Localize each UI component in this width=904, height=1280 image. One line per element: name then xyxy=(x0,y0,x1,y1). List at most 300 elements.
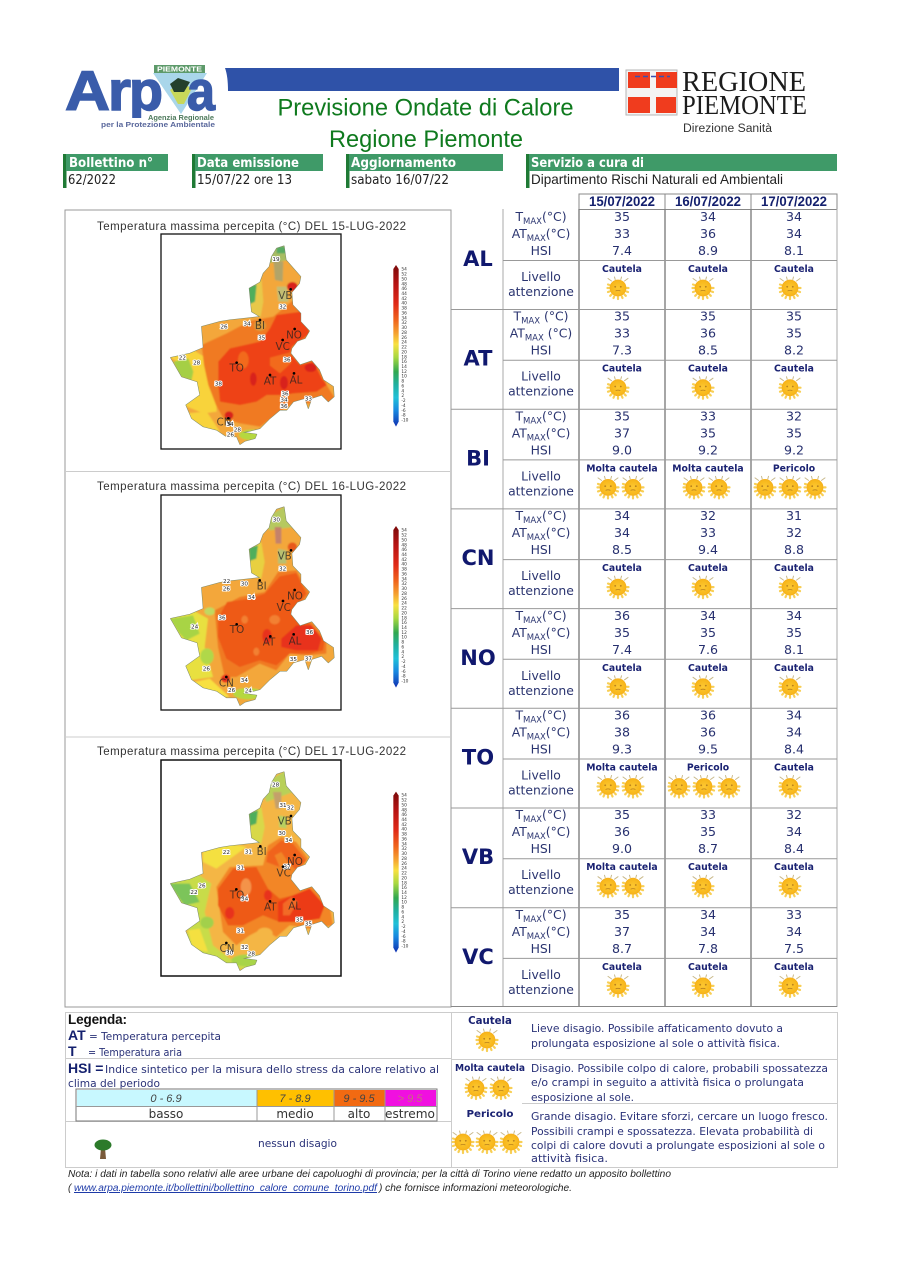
colour scale: -2 xyxy=(401,924,406,930)
colour scale: 26 xyxy=(401,596,407,602)
city markers: AT xyxy=(264,902,277,914)
values 17/07: 34 xyxy=(786,924,802,939)
map frame 15 luglio xyxy=(161,234,341,449)
colour scale: 22 xyxy=(401,345,407,351)
row labels: AT xyxy=(512,226,527,241)
values 16/07 xyxy=(688,807,728,897)
values 15/07: 36 xyxy=(614,824,630,839)
values 16/07: 33 xyxy=(700,807,716,822)
map values: 37 xyxy=(305,656,312,662)
row labels: (°C) xyxy=(542,708,567,722)
date header: 17/07/2022 xyxy=(761,193,827,209)
values 15/07: 35 xyxy=(614,209,630,224)
values 16/07: 8.9 xyxy=(698,243,718,258)
province code: BI xyxy=(466,446,490,470)
values 16/07: 9.2 xyxy=(698,442,718,457)
values 16/07: 34 xyxy=(700,907,716,922)
info: aggiornamento xyxy=(346,154,503,188)
values 17/07: Cautela xyxy=(774,364,814,375)
values 16/07: Cautela xyxy=(688,364,728,375)
colour scale: 30 xyxy=(401,851,407,857)
values 16/07: 36 xyxy=(700,724,716,740)
values 15/07 xyxy=(602,309,642,399)
map values: 26 xyxy=(228,688,236,694)
values 15/07: 9.0 xyxy=(612,442,632,457)
row: VC xyxy=(462,907,837,997)
colour scale: -4 xyxy=(401,403,406,409)
legend HSI: clima del periodo xyxy=(68,1077,160,1090)
values 17/07: 8.2 xyxy=(784,343,804,358)
colour scale: 34 xyxy=(401,315,407,321)
note: Nota: i dati in tabella sono relativi alle aree urbane dei capoluoghi di provincia; per la città di Torino viene redatto un apposito bollettino xyxy=(68,1169,671,1180)
values 15/07: 7.4 xyxy=(612,642,632,657)
row labels: attenzione xyxy=(508,583,574,598)
values 16/07: 34 xyxy=(700,209,716,224)
title: Regione Piemonte xyxy=(329,126,523,153)
values 17/07: Pericolo xyxy=(773,463,815,474)
title xyxy=(278,94,574,153)
values 16/07: 33 xyxy=(700,408,716,423)
row labels: HSI xyxy=(531,542,551,557)
values 16/07: 8.7 xyxy=(698,841,718,856)
flag xyxy=(626,70,677,115)
legend HSI: HSI = xyxy=(68,1060,103,1076)
row labels: attenzione xyxy=(508,284,574,299)
note: www.arpa.piemonte.it/bollettini/bollettino_calore_comune_torino.pdf xyxy=(74,1183,378,1194)
colour scale: -8 xyxy=(401,939,406,945)
colour scale: -10 xyxy=(401,418,409,424)
wordmark: REGIONE xyxy=(682,66,806,98)
map 17 luglio xyxy=(170,772,408,971)
map values: 34 xyxy=(248,595,255,601)
values 15/07: Cautela xyxy=(602,563,642,574)
map values: 35 xyxy=(296,918,303,924)
colour scale: -6 xyxy=(401,408,406,414)
map values: 22 xyxy=(190,890,198,896)
HSI scale table xyxy=(76,1089,437,1121)
province code: VB xyxy=(462,845,494,869)
row labels xyxy=(508,209,574,299)
legend HSI: Indice sintetico per la misura dello stress da calore relativo al xyxy=(105,1063,439,1076)
panel: maps xyxy=(65,210,451,1007)
map values: 36 xyxy=(281,392,289,398)
info: data emissione xyxy=(192,154,323,188)
logo: Arpa Piemonte xyxy=(65,59,216,129)
values 15/07: 9.3 xyxy=(612,742,632,756)
row labels: MAX xyxy=(525,334,544,344)
colour scale: 6 xyxy=(401,909,404,915)
colour scale: -4 xyxy=(401,929,406,935)
row labels: T xyxy=(513,309,521,324)
values 17/07: 8.4 xyxy=(784,742,804,756)
caption: Direzione Sanità xyxy=(683,123,773,135)
colour scale: 14 xyxy=(401,364,407,370)
colour scale: 28 xyxy=(401,591,407,597)
values 16/07: 35 xyxy=(700,625,716,640)
colour scale: 2 xyxy=(401,919,404,925)
map values: 28 xyxy=(234,428,241,434)
colour scale: 48 xyxy=(401,807,407,813)
date header: 16/07/2022 xyxy=(675,193,741,209)
colour scale: 38 xyxy=(401,832,407,838)
values 15/07: 7.4 xyxy=(612,243,632,258)
colour scale: 38 xyxy=(401,306,407,312)
row labels: T xyxy=(515,209,523,224)
row labels: HSI xyxy=(531,841,551,856)
map values: 34 xyxy=(241,897,249,903)
values 16/07: 33 xyxy=(700,525,716,540)
row labels: (°C) xyxy=(542,807,567,822)
map values: 34 xyxy=(243,321,251,327)
values 17/07: Cautela xyxy=(774,762,814,774)
values 16/07: Cautela xyxy=(688,563,728,574)
colour scale: 4 xyxy=(401,388,404,394)
city markers xyxy=(219,549,303,689)
row: CN xyxy=(451,508,837,609)
row labels: (°C) xyxy=(546,525,570,540)
map values xyxy=(190,782,312,958)
values 16/07 xyxy=(688,508,728,598)
row labels: HSI xyxy=(531,941,551,956)
values 15/07: Molta cautela xyxy=(586,762,658,774)
colour scale: -6 xyxy=(401,934,406,940)
row labels: AT xyxy=(512,525,527,540)
colour scale: 48 xyxy=(401,542,407,548)
colour scale: 20 xyxy=(401,349,407,355)
colour scale: 46 xyxy=(401,286,407,292)
legend Cautela: Cautela xyxy=(468,1016,512,1027)
colour scale: 16 xyxy=(401,620,407,626)
values 17/07: 7.5 xyxy=(784,941,804,956)
values 17/07: 33 xyxy=(786,907,802,922)
values 15/07: Cautela xyxy=(602,264,642,275)
values 15/07: 37 xyxy=(614,425,630,440)
city markers: VC xyxy=(276,341,290,353)
colour scale: 10 xyxy=(401,374,407,380)
row labels: HSI xyxy=(531,442,551,457)
colour scale: 50 xyxy=(401,276,407,282)
colour scale: 28 xyxy=(401,330,407,336)
city markers: VB xyxy=(278,551,292,563)
province code: VC xyxy=(462,945,494,969)
row: VB xyxy=(451,807,837,908)
row labels: MAX xyxy=(527,832,546,842)
values 15/07: Cautela xyxy=(602,364,642,375)
map values: 35 xyxy=(305,921,312,927)
values 16/07 xyxy=(668,708,740,798)
city markers: TO xyxy=(229,624,244,636)
row labels: attenzione xyxy=(508,483,574,498)
values 15/07: Molta cautela xyxy=(586,463,658,474)
values 16/07: 7.6 xyxy=(698,642,718,657)
values 17/07: 31 xyxy=(786,508,802,523)
row labels: MAX xyxy=(527,932,546,942)
values 17/07: 32 xyxy=(786,408,802,423)
HSI scale table: > 9.5 xyxy=(398,1093,423,1105)
colour scale: 44 xyxy=(401,552,407,558)
row labels: MAX xyxy=(523,416,542,426)
info: data emissione: 15/07/22 ore 13 xyxy=(197,173,292,188)
legend Molta cautela xyxy=(455,1062,828,1104)
values 16/07: 9.5 xyxy=(698,742,718,756)
row labels: T xyxy=(515,608,523,623)
values 17/07: 35 xyxy=(786,326,802,341)
map values: 36 xyxy=(280,404,288,410)
colour scale: -6 xyxy=(401,669,406,675)
row labels: MAX xyxy=(521,317,540,327)
legend Pericolo: attività fisica. xyxy=(531,1152,608,1165)
row labels: (°C) xyxy=(546,425,570,440)
map values: 28 xyxy=(248,952,255,958)
city markers: AL xyxy=(288,901,301,913)
colour scale: 22 xyxy=(401,871,407,877)
city markers: TO xyxy=(229,890,244,902)
row labels: MAX xyxy=(527,633,546,643)
colour scale: 24 xyxy=(401,340,407,346)
colour scale: 50 xyxy=(401,802,407,808)
map values: 34 xyxy=(241,678,248,684)
info: servizio xyxy=(526,154,837,188)
map frame 16 luglio xyxy=(161,495,341,710)
map values: 22 xyxy=(179,356,186,362)
map title 15 luglio: Temperatura massima percepita (°C) DEL 15-LUG-2022 xyxy=(97,221,406,233)
legend Molta cautela: Molta cautela xyxy=(455,1063,525,1074)
legend AT: = Temperatura percepita xyxy=(89,1030,221,1043)
city markers: AT xyxy=(264,375,277,387)
row labels: MAX xyxy=(523,516,542,526)
values 16/07: Cautela xyxy=(688,962,728,973)
map values xyxy=(179,257,312,438)
colour scale: 26 xyxy=(401,335,407,341)
values 17/07 xyxy=(774,309,814,399)
logo wordmark: A xyxy=(65,59,110,122)
colour scale: 16 xyxy=(401,359,407,365)
values 17/07 xyxy=(754,408,826,498)
colour scale: 8 xyxy=(401,640,404,646)
province code: TO xyxy=(462,746,494,770)
colour scale: 48 xyxy=(401,281,407,287)
map values: 30 xyxy=(278,831,286,837)
map values: 28 xyxy=(193,360,201,366)
values 17/07 xyxy=(774,807,814,897)
row labels: T xyxy=(515,907,523,922)
row labels: AT xyxy=(512,924,527,939)
city markers: VB xyxy=(278,290,292,302)
values 16/07: 34 xyxy=(700,924,716,939)
colour scale: 26 xyxy=(401,861,407,867)
map values: 22 xyxy=(223,579,231,585)
map frame 17 luglio xyxy=(161,760,341,976)
map values: 26 xyxy=(198,884,206,890)
colour scale: 16 xyxy=(401,885,407,891)
row: BI xyxy=(451,408,837,509)
colour scale: 18 xyxy=(401,880,407,886)
values 15/07: 8.7 xyxy=(612,941,632,956)
legend Pericolo xyxy=(452,1109,828,1165)
values 16/07: 7.8 xyxy=(698,941,718,956)
province code: AT xyxy=(464,347,493,371)
colour scale: 36 xyxy=(401,836,407,842)
values 17/07: Cautela xyxy=(774,663,814,674)
colour scale: 6 xyxy=(401,383,404,389)
row labels: Livello xyxy=(521,269,561,284)
logo wordmark: p xyxy=(129,59,163,122)
map values: 33 xyxy=(305,397,312,403)
colour scale: 36 xyxy=(401,310,407,316)
info: data emissione: Data emissione xyxy=(197,156,299,171)
legend Pericolo: Grande disagio. Evitare sforzi, cercare un luogo fresco. xyxy=(531,1110,828,1123)
map values: 26 xyxy=(203,666,210,672)
values 17/07: 35 xyxy=(786,425,802,440)
row labels: attenzione xyxy=(508,683,574,698)
city markers: AL xyxy=(290,374,303,386)
values 16/07: Cautela xyxy=(688,663,728,674)
values 15/07 xyxy=(602,508,642,598)
values 15/07: Cautela xyxy=(602,962,642,973)
row labels: MAX xyxy=(523,915,542,925)
values 16/07: 9.4 xyxy=(698,542,718,557)
city markers: BI xyxy=(255,320,265,332)
colour scale: 12 xyxy=(401,895,407,901)
values 16/07: 36 xyxy=(700,326,716,341)
row labels: attenzione xyxy=(508,882,574,897)
map values: 36 xyxy=(283,357,291,363)
note: ) che fornisce informazioni meteorologiche. xyxy=(378,1183,572,1194)
HSI scale table: basso xyxy=(149,1107,183,1121)
info: aggiornamento: Aggiornamento xyxy=(351,156,456,171)
legend Molta cautela: esposizione al sole. xyxy=(531,1091,634,1104)
city markers: NO xyxy=(286,329,302,341)
row labels: MAX xyxy=(527,234,546,244)
values 15/07: 34 xyxy=(614,508,630,523)
colour scale: 6 xyxy=(401,644,404,650)
row labels: (°C) xyxy=(540,309,569,324)
values 17/07 xyxy=(774,508,814,598)
colour scale: 50 xyxy=(401,537,407,543)
colour scale: 20 xyxy=(401,610,407,616)
colour scale: 44 xyxy=(401,817,407,823)
colour scale: 10 xyxy=(401,635,407,641)
logo caption: per la Protezione Ambientale xyxy=(101,120,215,129)
colour scale: 8 xyxy=(401,379,404,385)
logo triangle xyxy=(153,73,207,114)
values 16/07: Molta cautela xyxy=(672,463,744,474)
date header xyxy=(579,193,837,210)
colour scale: 38 xyxy=(401,567,407,573)
city markers: NO xyxy=(287,856,303,868)
map values: 35 xyxy=(290,657,297,663)
city markers: VB xyxy=(278,816,292,828)
colour scale: -10 xyxy=(401,679,409,685)
values 16/07: Cautela xyxy=(688,862,728,873)
map 15 luglio xyxy=(170,246,408,445)
row labels: (°C) xyxy=(542,907,567,922)
row labels: (°C) xyxy=(546,824,570,839)
colour scale: 52 xyxy=(401,798,407,804)
values 16/07: 32 xyxy=(700,508,716,523)
row labels: Livello xyxy=(521,867,561,882)
values 15/07: 35 xyxy=(614,625,630,640)
values 15/07: Cautela xyxy=(602,663,642,674)
colour scale: -8 xyxy=(401,413,406,419)
row labels: attenzione xyxy=(508,982,574,997)
colour scale: 40 xyxy=(401,301,407,307)
colour scale: 14 xyxy=(401,625,407,631)
values 16/07: 8.5 xyxy=(698,343,718,358)
wordmark xyxy=(682,66,807,120)
row labels xyxy=(508,907,574,997)
map values: 31 xyxy=(237,866,244,872)
values 17/07 xyxy=(774,608,814,698)
legend Cautela: prolungata esposizione al sole o attività fisica. xyxy=(531,1037,780,1050)
values 17/07: 34 xyxy=(786,708,802,722)
colour scale: -2 xyxy=(401,659,406,665)
logo label: Piemonte: PIEMONTE xyxy=(157,66,202,74)
HSI scale table: 9 - 9.5 xyxy=(343,1093,375,1105)
row labels xyxy=(508,408,574,498)
row labels: MAX xyxy=(527,433,546,443)
values 17/07 xyxy=(774,907,814,997)
map values: 30 xyxy=(241,581,248,587)
row labels: AT xyxy=(512,824,527,839)
map values: 28 xyxy=(272,782,280,788)
values 15/07: 35 xyxy=(614,309,630,324)
values 17/07: Cautela xyxy=(774,563,814,574)
colour scale: 30 xyxy=(401,325,407,331)
note: ( xyxy=(68,1183,73,1194)
row labels xyxy=(508,708,574,798)
logo wordmark: a xyxy=(187,59,216,122)
colour scale: -10 xyxy=(401,944,409,950)
row labels xyxy=(508,807,574,897)
legend HSI xyxy=(68,1060,439,1090)
values 15/07 xyxy=(602,907,642,997)
map values: 31 xyxy=(245,849,252,855)
values 15/07: 8.5 xyxy=(612,542,632,557)
values 17/07: 34 xyxy=(786,226,802,241)
values 16/07 xyxy=(688,209,728,299)
row labels: MAX xyxy=(523,217,542,227)
HSI scale table: estremo xyxy=(385,1107,435,1121)
note xyxy=(68,1169,671,1194)
logo: Regione Piemonte xyxy=(626,66,807,135)
map values: 26 xyxy=(220,325,228,331)
HSI scale table: 0 - 6.9 xyxy=(150,1093,182,1105)
colour scale: 24 xyxy=(401,866,407,872)
row labels: AT xyxy=(512,724,527,740)
colour scale: 22 xyxy=(401,606,407,612)
colour scale: 28 xyxy=(401,856,407,862)
legend T: = Temperatura aria xyxy=(88,1046,182,1059)
row labels: Livello xyxy=(521,967,561,982)
logo caption xyxy=(101,113,215,129)
row labels: (°C) xyxy=(546,724,570,740)
city markers: AL xyxy=(289,635,302,647)
colour scale: 12 xyxy=(401,630,407,636)
city markers: VC xyxy=(277,868,291,880)
colour scale: 54 xyxy=(401,793,407,799)
row labels: MAX xyxy=(527,732,546,742)
row labels: MAX xyxy=(523,815,542,825)
values 17/07 xyxy=(774,209,814,299)
city markers: CN xyxy=(219,677,234,689)
row labels: (°C) xyxy=(546,625,570,640)
row labels: (°C) xyxy=(542,508,567,523)
row labels: HSI xyxy=(531,343,551,358)
values 17/07: 34 xyxy=(786,824,802,839)
colour scale: 34 xyxy=(401,841,407,847)
city markers: NO xyxy=(287,591,303,603)
